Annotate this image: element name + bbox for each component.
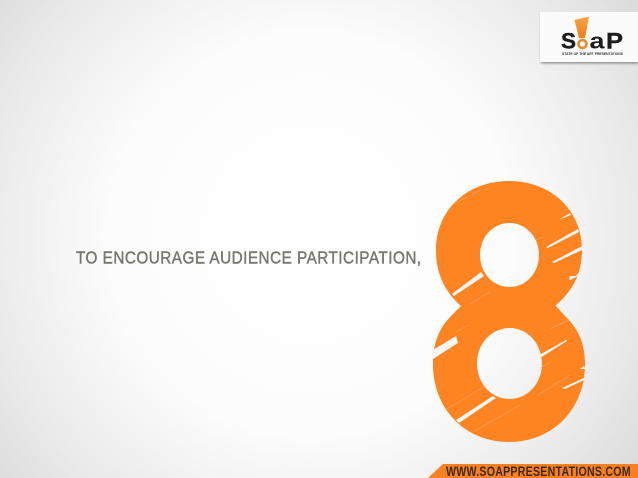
scratches on the 8 bbox=[433, 213, 585, 423]
logo wordmark: S bbox=[561, 28, 576, 54]
icon: exclamation mark bbox=[574, 16, 589, 48]
logo wordmark: P bbox=[606, 28, 623, 54]
logo card bbox=[540, 12, 638, 64]
upper ring of the 8 bbox=[436, 181, 582, 306]
footer banner bbox=[428, 464, 638, 478]
logo wordmark: a bbox=[590, 28, 605, 54]
lower ring of the 8 bbox=[433, 296, 585, 442]
headline text: TO ENCOURAGE AUDIENCE PARTICIPATION, bbox=[76, 247, 421, 268]
logo tagline: STATE OF THE ART PRESENTATIONS bbox=[562, 52, 623, 56]
big number 8 bbox=[433, 181, 585, 442]
faint scratches on the 8 bbox=[447, 190, 570, 432]
logo wordmark bbox=[561, 28, 623, 54]
